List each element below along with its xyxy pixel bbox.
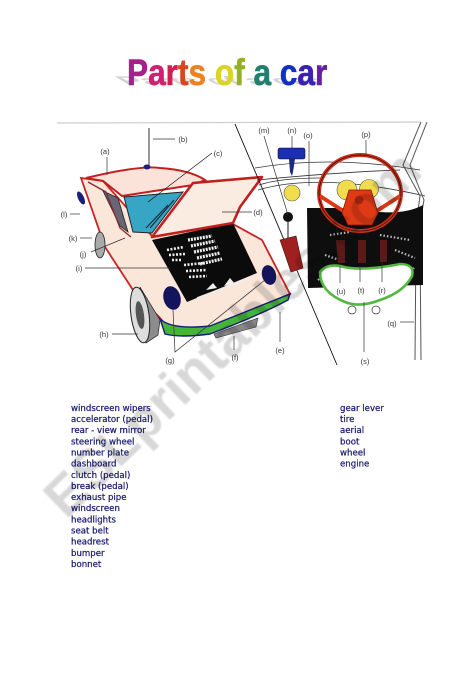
engine bay xyxy=(152,223,257,302)
floor xyxy=(307,205,423,288)
part letters: (n) xyxy=(287,126,297,135)
part letters: (d) xyxy=(253,208,263,217)
part letters: (s) xyxy=(361,357,370,366)
word list: left column: accelerator (pedal) xyxy=(71,415,153,425)
word list: left column xyxy=(71,404,153,570)
side windows xyxy=(103,191,128,232)
title shadow: Parts of a car xyxy=(109,74,332,88)
part letters: (q) xyxy=(387,319,397,328)
rear-view mirror xyxy=(278,148,305,176)
word list: left column: windscreen xyxy=(71,504,120,514)
part letters: (j) xyxy=(80,250,87,259)
word list: left column: windscreen wipers xyxy=(71,404,151,414)
part letters: (o) xyxy=(303,131,313,140)
rear light xyxy=(75,190,87,206)
floor speckle xyxy=(318,232,415,280)
bumper xyxy=(160,294,290,336)
part letters: (c) xyxy=(214,149,223,158)
windscreen xyxy=(124,192,183,233)
open bonnet xyxy=(152,177,262,237)
part letters: (l) xyxy=(61,210,68,219)
word list: left column: number plate xyxy=(71,448,129,458)
part letters: (h) xyxy=(99,330,109,339)
word list: right column: engine xyxy=(340,460,369,470)
part letters: (f) xyxy=(231,353,239,362)
rear aerial base xyxy=(144,164,150,170)
floor mounts xyxy=(348,306,380,314)
watermark: ESLprintables.com xyxy=(31,138,433,529)
part letters: (p) xyxy=(361,130,371,139)
pedals xyxy=(336,240,387,263)
word list: left column: bonnet xyxy=(71,560,102,570)
steering wheel xyxy=(319,155,401,231)
windscreen wipers xyxy=(146,200,174,228)
word list: right column: wheel xyxy=(340,448,365,458)
number plate xyxy=(214,318,258,338)
part letters: (e) xyxy=(275,346,285,355)
dashboard lines xyxy=(255,162,425,196)
word list: right column: aerial xyxy=(340,426,364,436)
part letters: (r) xyxy=(378,286,386,295)
word list: left column: steering wheel xyxy=(71,438,134,448)
gear lever xyxy=(280,212,303,272)
part letters: (t) xyxy=(357,286,365,295)
engine xyxy=(167,236,250,298)
leader lines xyxy=(70,128,414,352)
word list: left column: dashboard xyxy=(71,460,116,470)
word list: right column xyxy=(340,404,384,470)
word list: left column: clutch (pedal) xyxy=(71,471,130,481)
roof xyxy=(86,167,205,196)
part letters: (k) xyxy=(69,234,78,243)
word list: right column: boot xyxy=(340,438,360,448)
part letters: (g) xyxy=(165,356,175,365)
rear wheel xyxy=(95,232,105,258)
word list: left column: headrest xyxy=(71,538,110,548)
part letters: (a) xyxy=(100,147,110,156)
interior diagram xyxy=(235,122,427,365)
word list: left column: break (pedal) xyxy=(71,482,129,492)
part letters: (u) xyxy=(336,287,346,296)
front wheel xyxy=(127,286,160,344)
title lettering: Parts of a car xyxy=(127,53,327,94)
headlights xyxy=(161,264,278,312)
word list: left column: seat belt xyxy=(71,526,109,536)
part letters: (i) xyxy=(76,264,83,273)
car body xyxy=(81,178,290,330)
word list: right column: tire xyxy=(340,415,354,425)
word list: left column: exhaust pipe xyxy=(71,493,127,503)
word list: left column: headlights xyxy=(71,516,117,526)
car diagram xyxy=(75,164,290,344)
gauges xyxy=(284,180,378,201)
part letters: (b) xyxy=(178,135,188,144)
word list: right column: gear lever xyxy=(340,404,384,414)
word list: left column: rear - view mirror xyxy=(71,426,146,436)
word list: left column: bumper xyxy=(71,549,105,559)
part letters xyxy=(61,126,397,366)
pedal footwell outline xyxy=(320,264,412,305)
door pillar xyxy=(403,122,427,360)
part letters: (m) xyxy=(258,126,270,135)
title: Parts of a car xyxy=(109,53,332,94)
